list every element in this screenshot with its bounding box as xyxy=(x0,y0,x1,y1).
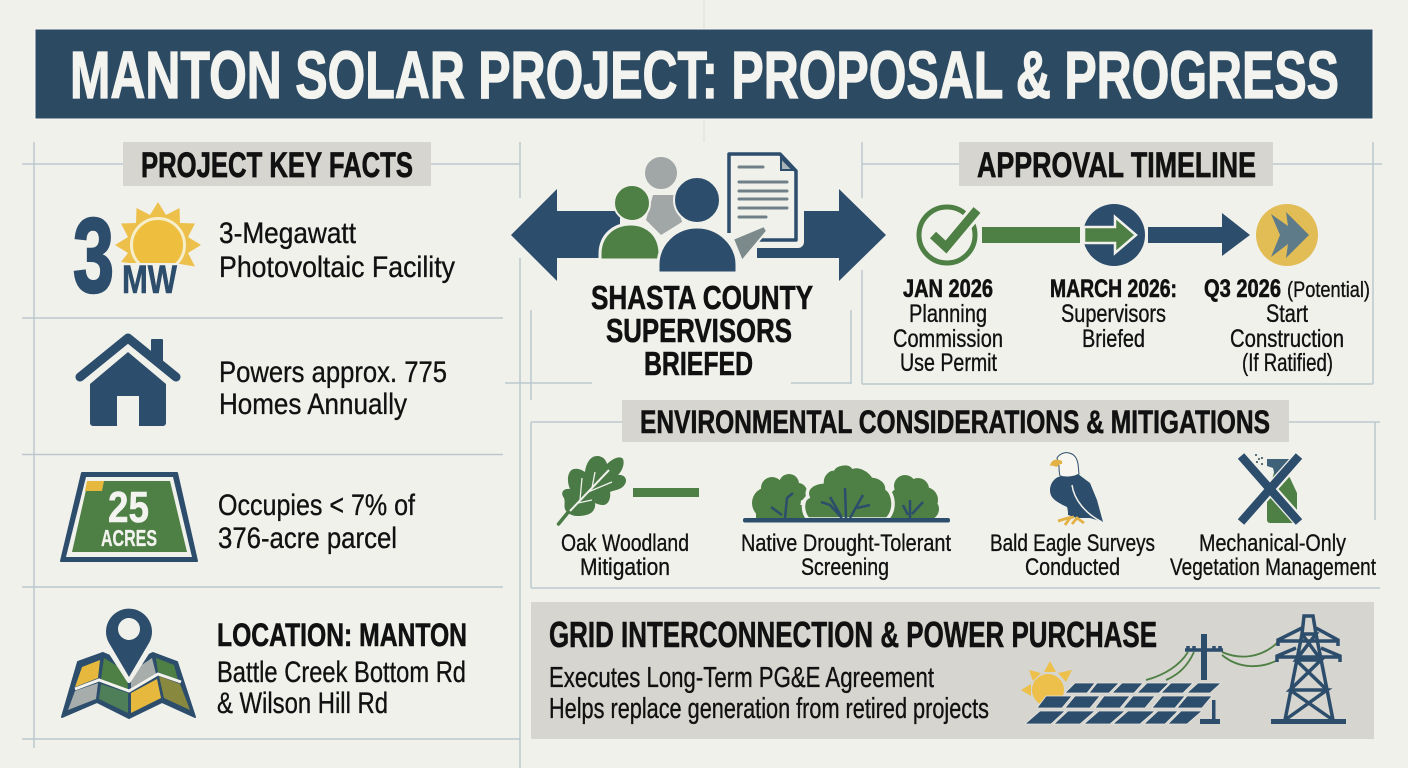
icon: dash xyxy=(633,488,699,497)
heading: grid interconnection and power purchase: GRID INTERCONNECTION & POWER PURCHASE xyxy=(549,614,1157,655)
text: oak woodland mitigation: Mitigation xyxy=(580,554,670,581)
text: Jan 2026 xyxy=(893,275,1003,377)
text: 3-megawatt facility: Photovoltaic Facility xyxy=(219,251,455,284)
icon: oak leaf xyxy=(558,456,626,524)
panel: environmental considerations xyxy=(558,400,1376,581)
icon: 25 acres parcel: 25 xyxy=(108,483,149,532)
text: parcel share: Occupies < 7% of xyxy=(218,489,416,522)
text: Jan 2026: Commission xyxy=(893,325,1003,353)
text: oak woodland mitigation: Oak Woodland xyxy=(561,530,689,557)
text: 3-megawatt facility: 3-Megawatt xyxy=(219,217,357,250)
text: PG&E agreement xyxy=(549,662,989,725)
text: homes powered xyxy=(219,356,447,421)
icon: crossed-out spray bottle xyxy=(1241,455,1299,523)
icon: house xyxy=(80,338,176,426)
arrow: navy arrow to Q3 xyxy=(1148,213,1250,256)
text: March 2026: MARCH 2026: xyxy=(1050,275,1177,303)
text: native drought-tolerant screening xyxy=(741,530,951,581)
text: 3-megawatt facility xyxy=(219,217,455,284)
text: Q3 2026 xyxy=(1204,275,1370,377)
text: Jan 2026: Use Permit xyxy=(900,349,997,377)
text: Q3 2026: (If Ratified) xyxy=(1242,349,1333,377)
icon: people with document xyxy=(600,152,798,273)
heading: shasta county supervisors briefed: SUPERVISORS xyxy=(606,312,792,349)
icon: two-way arrow xyxy=(511,189,886,281)
text: Jan 2026: JAN 2026 xyxy=(903,275,993,303)
heading: shasta county supervisors briefed: SHASTA COUNTY xyxy=(591,279,813,316)
icon: 25 acres parcel xyxy=(61,473,197,561)
heading: shasta county supervisors briefed xyxy=(591,279,813,382)
text: oak woodland mitigation xyxy=(561,530,689,581)
text: parcel share: 376-acre parcel xyxy=(218,522,397,555)
text: native drought-tolerant screening: Screening xyxy=(801,554,889,581)
text: mechanical-only vegetation management: Mechanical-Only xyxy=(1199,530,1347,557)
text: bald eagle surveys: Bald Eagle Surveys xyxy=(990,530,1155,557)
icon: 25 acres parcel: ACRES xyxy=(101,525,157,551)
icon: check circle xyxy=(919,207,977,263)
text: PG&E agreement: Helps replace generation from retired projects xyxy=(549,693,989,725)
text: PG&E agreement: Executes Long-Term PG&E Agreement xyxy=(549,662,934,694)
text: bald eagle surveys xyxy=(990,530,1155,581)
icon: utility pole and wires xyxy=(1146,634,1278,724)
icon: shrubs xyxy=(743,464,950,522)
icon: 3 MW with sun: 3 xyxy=(73,197,114,315)
text: native drought-tolerant screening: Native Drought-Tolerant xyxy=(741,530,951,557)
text: bald eagle surveys: Conducted xyxy=(1025,554,1120,581)
text: mechanical-only vegetation management xyxy=(1170,530,1376,581)
text: Jan 2026: Planning xyxy=(909,300,987,328)
icon: 3 MW with sun xyxy=(73,197,201,315)
heading: project key facts: PROJECT KEY FACTS xyxy=(141,146,413,185)
heading: shasta county supervisors briefed: BRIEFED xyxy=(644,345,753,382)
text: Q3 2026: Construction xyxy=(1230,325,1344,353)
heading: approval timeline: APPROVAL TIMELINE xyxy=(977,146,1256,185)
text: March 2026: Supervisors xyxy=(1061,300,1166,328)
text: homes powered: Powers approx. 775 xyxy=(219,356,447,389)
text: homes powered: Homes Annually xyxy=(219,388,407,421)
text: location xyxy=(217,617,467,720)
text: location: LOCATION: MANTON xyxy=(217,617,467,653)
icon: bald eagle xyxy=(1050,453,1103,525)
text: Q3 2026: (Potential) xyxy=(1287,277,1370,302)
arrow: green progress bar xyxy=(982,227,1080,243)
panel: project key facts xyxy=(61,142,467,720)
text: location: Battle Creek Bottom Rd xyxy=(217,656,466,689)
panel: supervisors briefed xyxy=(511,152,886,382)
text: March 2026: Briefed xyxy=(1082,325,1145,353)
text: parcel share xyxy=(218,489,416,555)
icon: 3 MW with sun: MW xyxy=(122,258,177,302)
heading: project key facts xyxy=(123,142,431,186)
icon: transmission tower xyxy=(1271,616,1346,724)
text: Q3 2026: Q3 2026 xyxy=(1204,275,1281,303)
icon: yellow circle with double chevron xyxy=(1256,204,1318,266)
icon: sun behind panels xyxy=(1021,661,1072,706)
panel: approval timeline xyxy=(893,142,1370,377)
text: location: & Wilson Hill Rd xyxy=(217,687,388,720)
icon: solar array xyxy=(1025,683,1221,724)
panel: grid interconnection xyxy=(531,602,1374,739)
text: Q3 2026: Start xyxy=(1266,300,1308,328)
icon: map with location pin xyxy=(62,609,195,718)
icon: navy circle with arrow xyxy=(1083,204,1145,266)
text: March 2026 xyxy=(1050,275,1177,353)
